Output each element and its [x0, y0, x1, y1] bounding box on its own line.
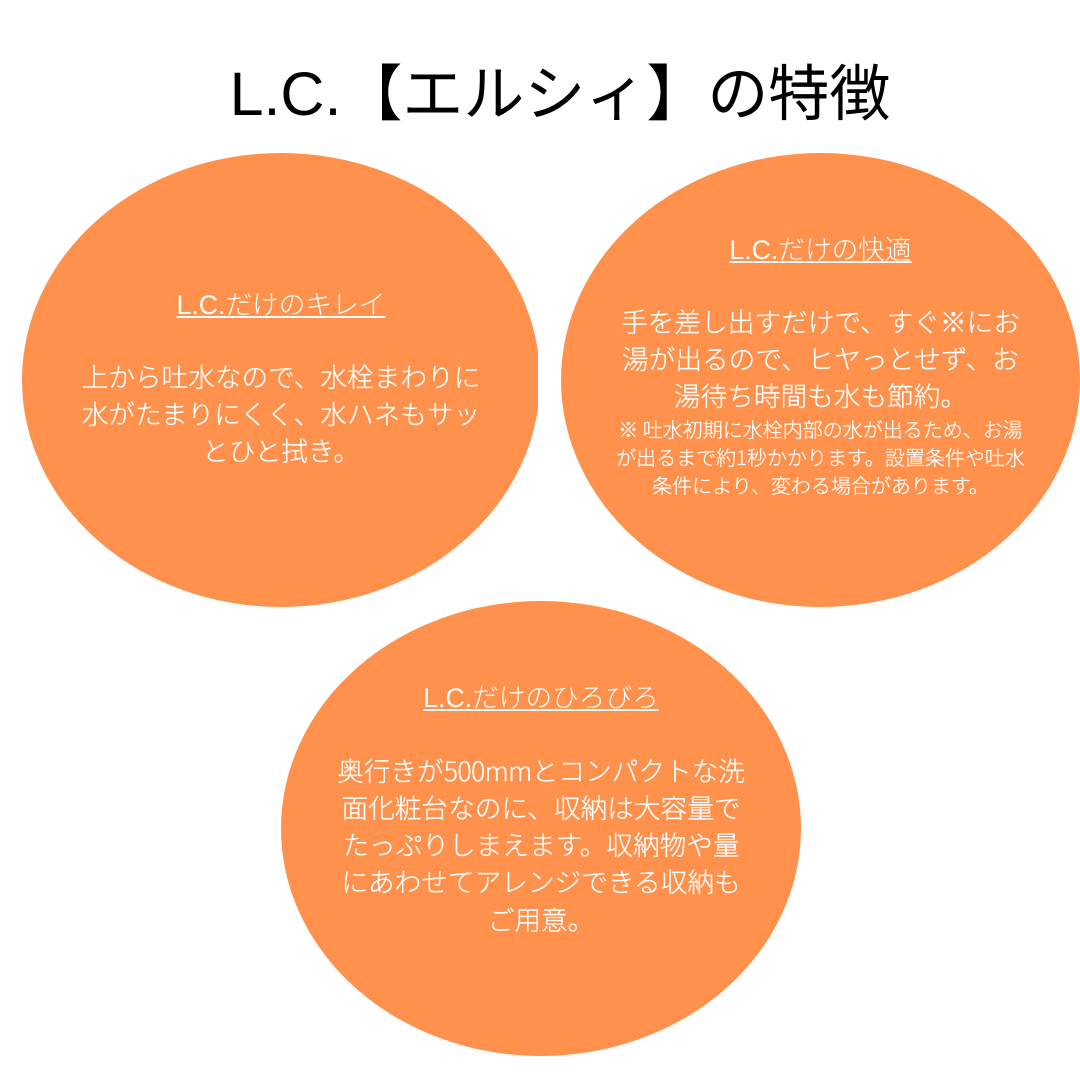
- body: comfort: 手を差し出すだけで、すぐ※にお: [621, 301, 1020, 340]
- panel: spaciousness: [281, 601, 801, 1056]
- text: comfort: [616, 235, 1025, 499]
- panel: comfort: [561, 153, 1080, 607]
- body: spaciousness: 面化粧台なのに、収納は大容量で: [341, 787, 741, 826]
- body: cleanliness: とひと拭き。: [202, 430, 360, 469]
- footnote: comfort: ※ 吐水初期に水栓内部の水が出るため、お湯: [618, 414, 1023, 443]
- body: spaciousness: ご用意。: [488, 899, 594, 938]
- footnote: comfort: 条件により、変わる場合があります。: [652, 470, 989, 499]
- body: spaciousness: [337, 750, 745, 938]
- heading: comfort: L.C.だけの快適: [729, 235, 912, 265]
- text: cleanliness: [82, 290, 480, 469]
- heading: cleanliness: L.C.だけのキレイ: [177, 290, 385, 320]
- body: cleanliness: 水がたまりにくく、水ハネもサッ: [82, 393, 480, 432]
- footnote: comfort: [616, 414, 1025, 499]
- body: cleanliness: [82, 356, 480, 469]
- body: cleanliness: 上から吐水なので、水栓まわりに: [82, 356, 480, 395]
- body: comfort: 湯待ち時間も水も節約。: [674, 375, 967, 414]
- panel: cleanliness: [22, 153, 540, 607]
- body: spaciousness: たっぷりしまえます。収納物や量: [342, 824, 740, 863]
- body: spaciousness: にあわせてアレンジできる収納も: [341, 861, 741, 900]
- body: comfort: [621, 301, 1020, 414]
- body: comfort: 湯が出るので、ヒヤっとせず、お: [622, 338, 1019, 377]
- body: spaciousness: 奥行きが500mmとコンパクトな洗: [337, 750, 745, 789]
- footnote: comfort: が出るまで約1秒かかります。設置条件や吐水: [616, 442, 1025, 471]
- text: spaciousness: [337, 683, 745, 938]
- heading: spaciousness: L.C.だけのひろびろ: [423, 683, 659, 713]
- title: L.C.【エルシィ】の特徴: [230, 60, 890, 128]
